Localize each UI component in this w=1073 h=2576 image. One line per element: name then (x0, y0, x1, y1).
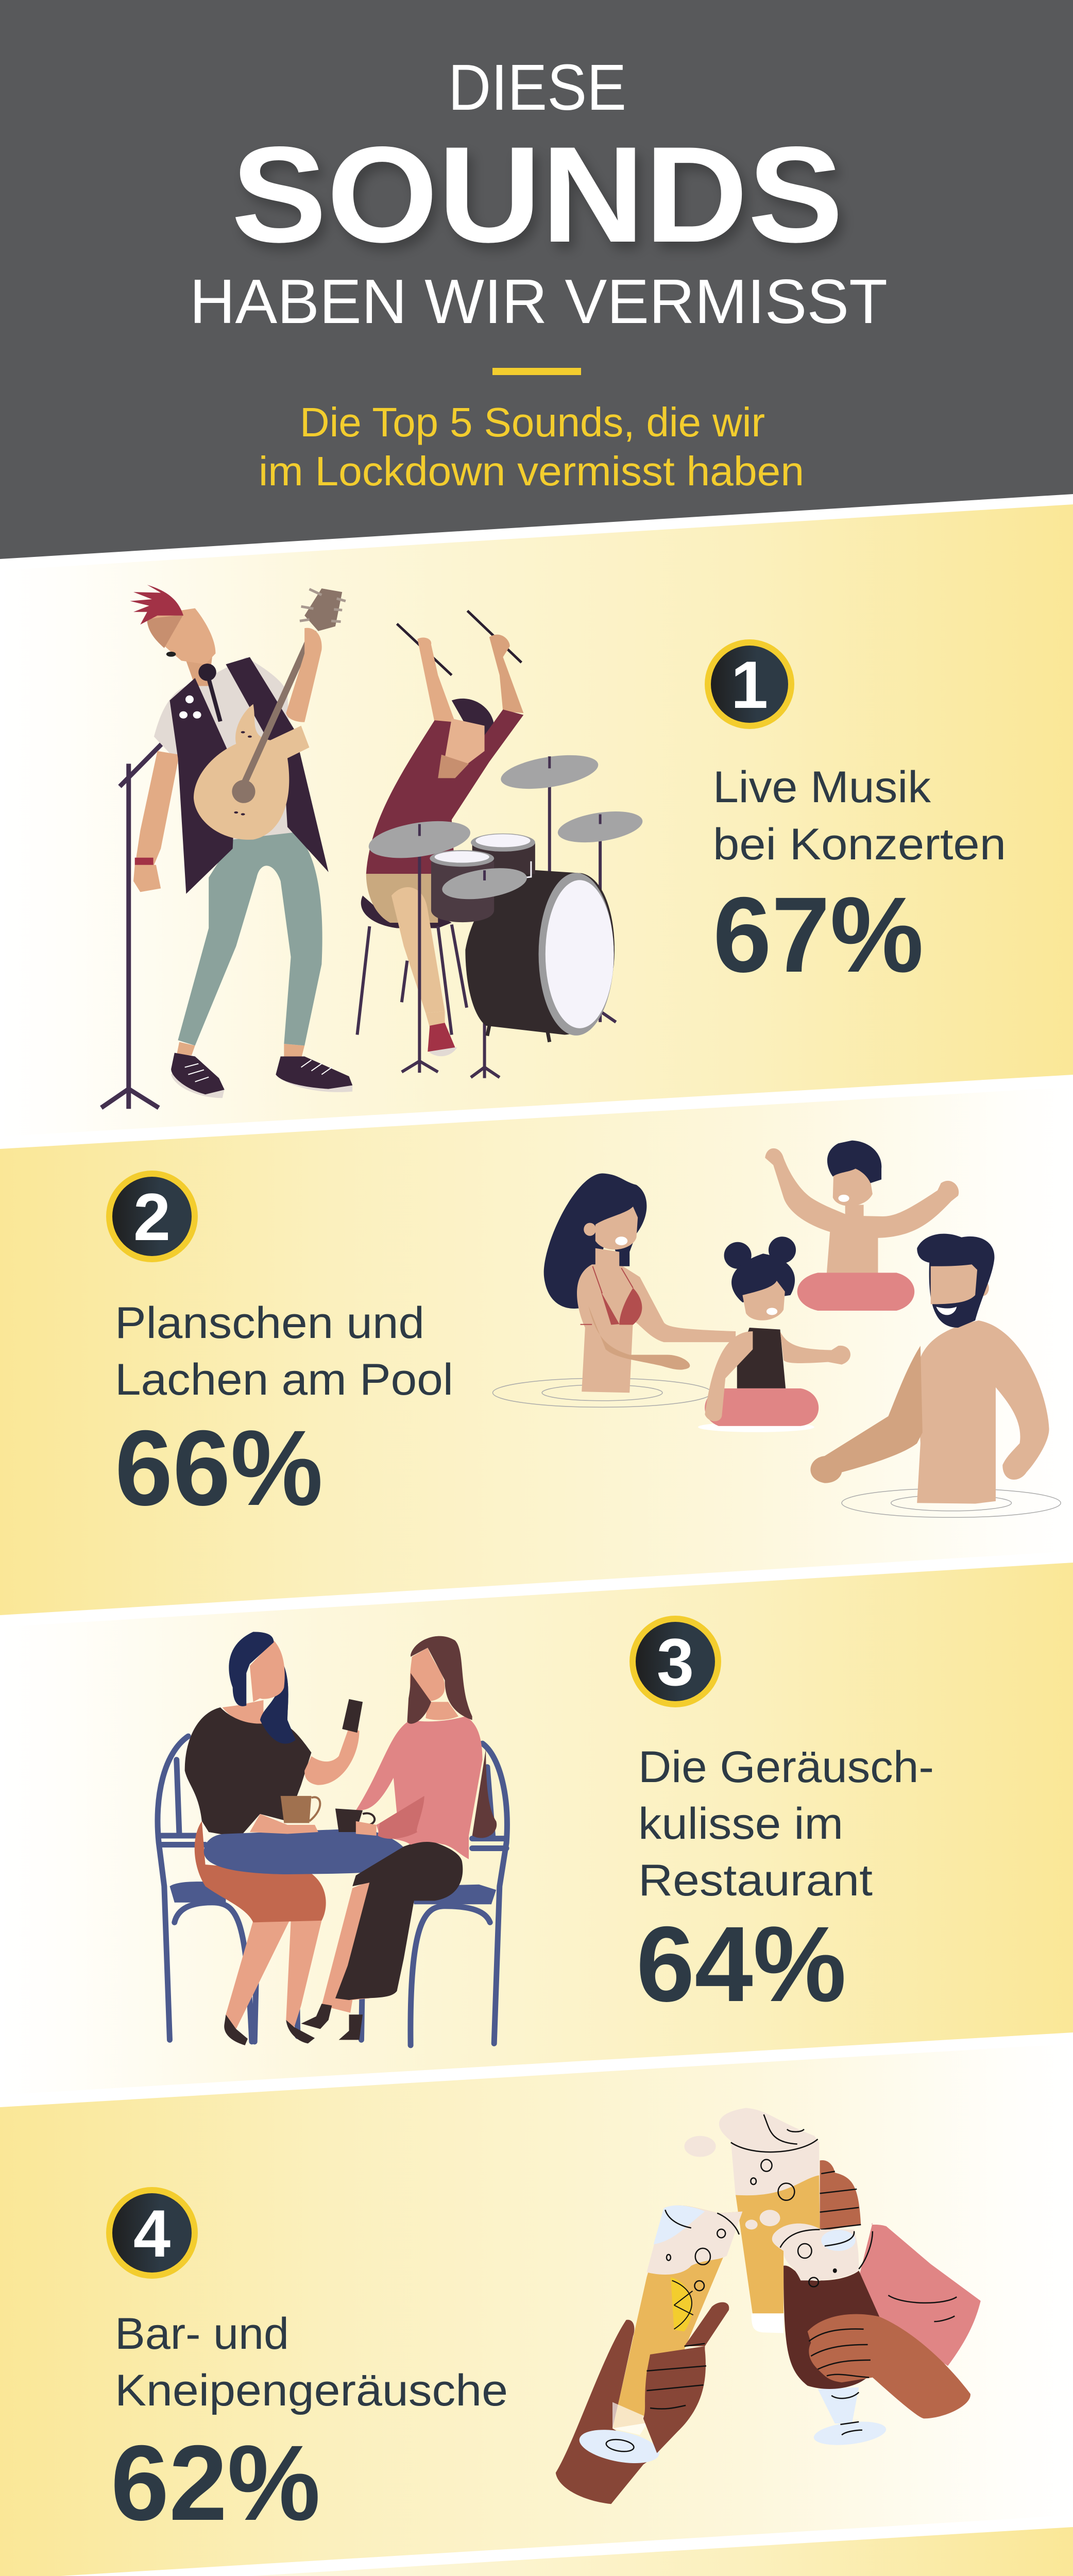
guitar (194, 588, 346, 840)
label 3 (638, 1742, 934, 1905)
label 1: Live Musik (713, 762, 931, 812)
chairs (158, 1736, 507, 2045)
label 2: Planschen und (115, 1298, 424, 1348)
label 2: Lachen am Pool (115, 1355, 453, 1404)
illustration: family in pool (493, 1141, 1061, 1517)
yellow divider (492, 368, 581, 375)
girl (698, 1236, 850, 1432)
label 3: Restaurant (638, 1856, 873, 1905)
subtitle: Die Top 5 Sounds, die wir (300, 399, 765, 445)
panel: 3 restaurant (0, 1563, 1073, 2095)
value 3: 64% (636, 1905, 846, 2024)
panel: 2 pool (0, 1087, 1073, 1615)
right glass (772, 2224, 970, 2449)
table (204, 1828, 409, 1874)
panel: 5 applause (0, 2527, 1073, 2576)
badge 1: 1 (731, 647, 768, 722)
label 2 (115, 1298, 453, 1404)
value 4: 62% (111, 2424, 320, 2543)
label 4 (115, 2309, 508, 2415)
badge 1 (705, 639, 794, 729)
badge 3 (629, 1616, 721, 1707)
illustration: band (101, 585, 651, 1109)
mic stand (101, 691, 213, 1109)
father (810, 1234, 1061, 1517)
mother (493, 1173, 736, 1407)
value 1: 67% (713, 875, 924, 995)
badge 3: 3 (657, 1624, 694, 1700)
label 3: kulisse im (638, 1799, 843, 1849)
back glass (684, 2108, 820, 2333)
badge 2: 2 (133, 1179, 171, 1255)
title: Diese: DIESE (448, 51, 626, 124)
drum kit (359, 749, 651, 1078)
woman right (301, 1636, 497, 2040)
badge 2 (106, 1171, 198, 1262)
label 1 (713, 762, 1006, 869)
illustration: clinking beer glasses (556, 2108, 981, 2504)
left glass (556, 2206, 742, 2504)
label 4: Kneipengeräusche (115, 2366, 508, 2415)
woman left (185, 1632, 363, 2045)
title: Sounds: SOUNDS (231, 118, 843, 271)
badge 4 (106, 2187, 198, 2279)
value 2: 66% (115, 1409, 323, 1528)
title: Haben wir vermisst: HABEN WIR VERMISST (190, 266, 888, 336)
badge 4: 4 (133, 2196, 171, 2271)
panel: 1 live music (0, 504, 1073, 1137)
label 4: Bar- und (115, 2309, 289, 2359)
boy (765, 1141, 959, 1311)
illustration: two women at cafe table (158, 1632, 507, 2045)
drummer (357, 611, 523, 1056)
panel: 4 bar (0, 2044, 1073, 2576)
cups and hands (250, 1796, 377, 1836)
label 3: Die Geräusch- (638, 1742, 934, 1792)
subtitle: im Lockdown vermisst haben (259, 448, 804, 494)
singer (130, 585, 352, 1098)
mic (198, 664, 220, 721)
label 1: bei Konzerten (713, 820, 1006, 869)
header panel (0, 0, 1073, 559)
subtitle (259, 399, 804, 494)
back hand and sleeve (820, 2160, 981, 2366)
